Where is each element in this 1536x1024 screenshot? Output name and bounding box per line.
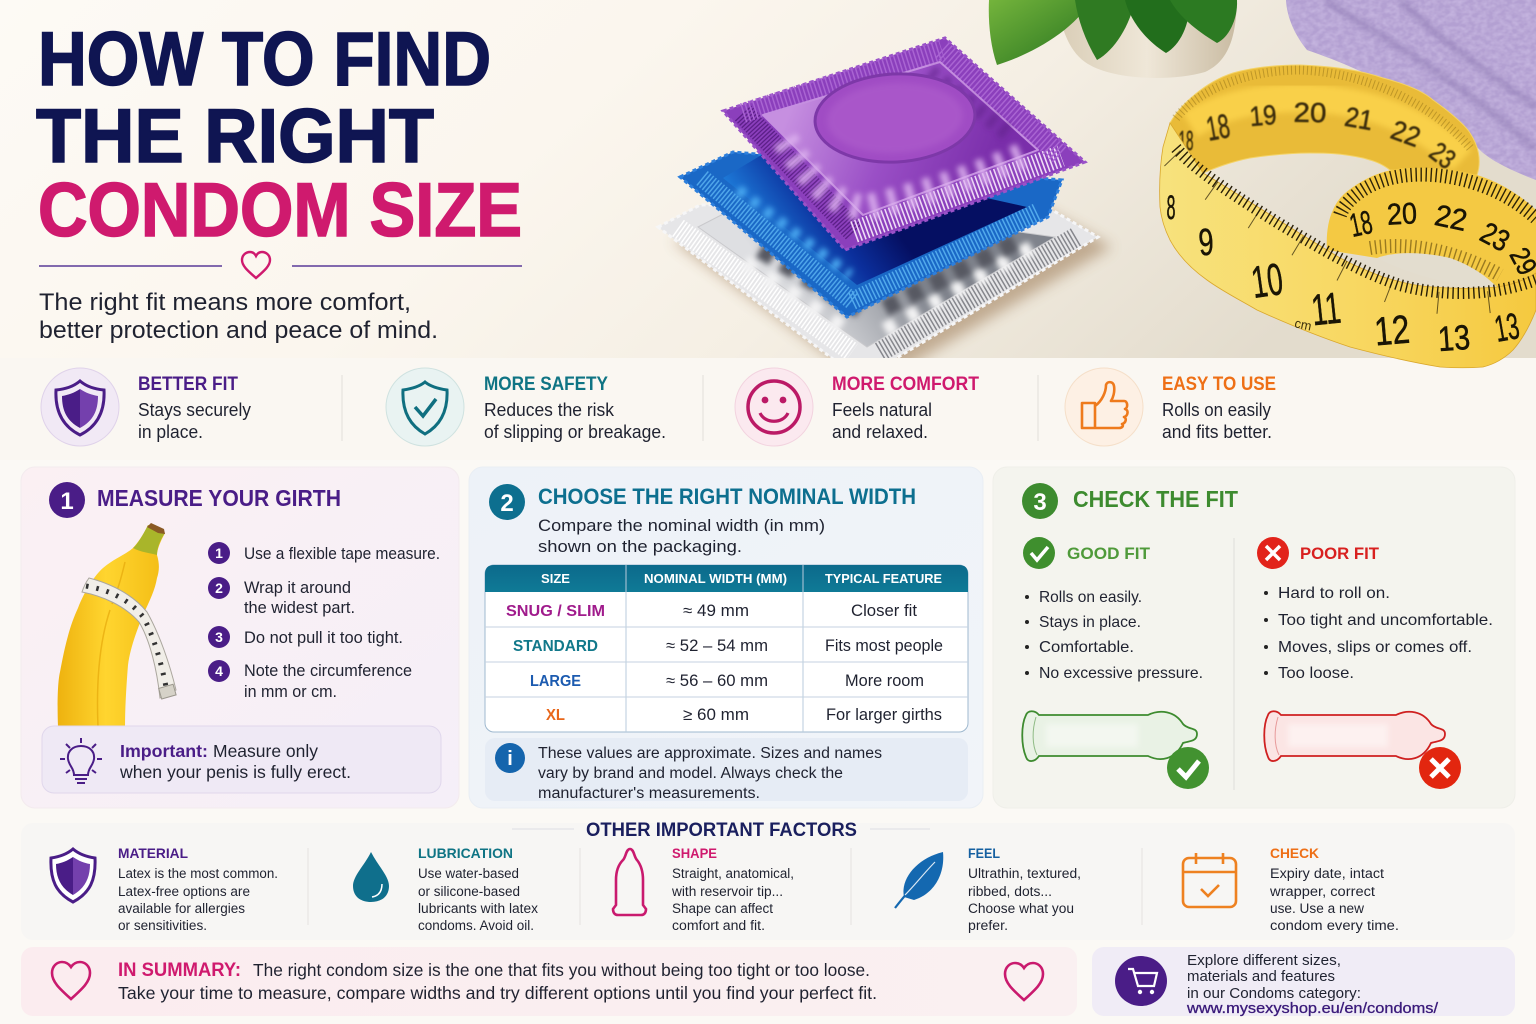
title: CONDOM SIZE <box>38 168 522 253</box>
factor: lubrication: Use water-based <box>418 866 519 881</box>
info note: manufacturer's measurements. <box>538 785 760 802</box>
more safety text: MORE SAFETY <box>484 374 608 395</box>
summary text: IN SUMMARY: <box>118 960 241 981</box>
heading: nominal width: CHOOSE THE RIGHT NOMINAL WIDTH <box>538 484 916 509</box>
icon: more safety shield <box>386 368 464 446</box>
shop text: materials and features <box>1187 969 1335 985</box>
factor: shape: with reservoir tip... <box>671 884 783 899</box>
factor: material: Latex is the most common. <box>118 866 278 881</box>
heading: other important factors: OTHER IMPORTANT FACTORS <box>586 820 857 841</box>
size table: Fits most people <box>825 637 943 655</box>
hero photo: yellow tape measure: 18 <box>1204 107 1233 149</box>
size table: STANDARD <box>513 638 598 655</box>
steps list: 1 <box>215 545 223 561</box>
factor: check: Expiry date, intact <box>1270 866 1384 881</box>
size table: NOMINAL WIDTH (MM) <box>644 571 787 586</box>
benefits row <box>41 368 1276 446</box>
intro text: shown on the packaging. <box>538 537 742 556</box>
poor fit column: POOR FIT <box>1300 544 1380 563</box>
good fit column: No excessive pressure. <box>1039 665 1203 682</box>
callout: important: when your penis is fully erect. <box>119 762 351 782</box>
hero photo: yellow tape measure: 18 <box>1346 203 1376 244</box>
factor: material: or sensitivities. <box>118 918 207 933</box>
step 3 badge <box>1022 483 1058 519</box>
shop text: www.mysexyshop.eu/en/condoms/ <box>1186 1001 1439 1017</box>
size table: XL <box>546 707 565 724</box>
banana with tape <box>58 523 176 727</box>
summary text: Take your time to measure, compare widths and try different options until you find your perfect fit. <box>118 983 877 1003</box>
callout: important: Measure only <box>213 741 318 761</box>
factor: lubrication: or silicone-based <box>418 884 520 899</box>
hero photo: yellow tape measure: 22 <box>1387 114 1425 153</box>
factor: material: available for allergies <box>118 901 245 916</box>
subtitle: The right fit means more comfort, <box>39 289 411 316</box>
step 2 badge: 2 <box>500 490 514 517</box>
step 3 badge: 3 <box>1033 489 1047 516</box>
icon: heart right <box>1005 963 1043 1000</box>
steps list: Do not pull it too tight. <box>244 629 403 647</box>
hero photo: yellow tape measure: 23 <box>1475 216 1515 259</box>
info note <box>485 738 968 802</box>
summary text: The right condom size is the one that fits you without being too tight or too loose. <box>253 960 870 980</box>
size table: ≈ 49 mm <box>683 602 749 620</box>
title <box>36 17 522 253</box>
good fit condom illustration <box>1022 711 1209 789</box>
factor: check <box>1269 845 1399 933</box>
steps list: the widest part. <box>244 599 355 617</box>
heading: measure your girth: MEASURE YOUR GIRTH <box>97 485 341 511</box>
shop text: in our Condoms category: <box>1187 986 1361 1002</box>
hero photo: yellow tape measure: 12 <box>1373 308 1411 354</box>
factor: shape: Shape can affect <box>672 901 773 916</box>
steps list: Wrap it around <box>244 579 351 597</box>
panel: choose the right nominal width <box>469 467 983 808</box>
more safety text: of slipping or breakage. <box>484 422 666 442</box>
more comfort text: Feels natural <box>832 400 932 420</box>
hero photo: yellow tape measure: 8 <box>1166 189 1176 227</box>
callout: important: Important: <box>120 741 208 761</box>
good fit column: Stays in place. <box>1039 614 1141 631</box>
factor: feel <box>968 845 1081 933</box>
size table: For larger girths <box>826 706 942 724</box>
hero photo: yellow tape measure: 20 <box>1386 197 1418 232</box>
panel: measure your girth <box>21 467 459 808</box>
factor: material: Latex-free options are <box>118 884 250 899</box>
size table: TYPICAL FEATURE <box>825 571 942 586</box>
shop text: Explore different sizes, <box>1187 953 1341 969</box>
factor: lubrication <box>418 845 538 933</box>
factor: check: use. Use a new <box>1270 901 1364 916</box>
hero photo: yellow tape measure: 21 <box>1342 101 1375 136</box>
intro text <box>538 516 825 556</box>
heading: check the fit: CHECK THE FIT <box>1073 486 1238 512</box>
good fit column: Comfortable. <box>1039 639 1134 656</box>
icon: heart left <box>52 962 90 999</box>
title divider with heart <box>39 252 522 278</box>
intro text: Compare the nominal width (in mm) <box>538 516 825 535</box>
easy to use text: and fits better. <box>1162 422 1272 442</box>
icon: condom outline <box>613 849 646 915</box>
factor: material <box>118 845 278 933</box>
more comfort text: and relaxed. <box>832 422 928 442</box>
steps list <box>208 542 440 701</box>
factor: feel: FEEL <box>968 845 1000 861</box>
size table: More room <box>845 672 924 690</box>
hero photo: yellow tape measure: 23 <box>1424 136 1462 175</box>
shop text <box>1186 953 1439 1017</box>
factor: shape <box>671 845 794 933</box>
info note: These values are approximate. Sizes and names <box>538 745 882 762</box>
hero photo: yellow tape measure: 19 <box>1248 99 1278 132</box>
icon: calendar check <box>1183 853 1236 907</box>
factor: feel: Ultrathin, textured, <box>968 866 1081 881</box>
better fit text <box>138 374 251 442</box>
icon: light bulb <box>60 738 102 783</box>
easy to use text <box>1162 374 1276 442</box>
hero photo: plant in pot <box>989 0 1237 78</box>
steps list: Note the circumference <box>244 662 412 680</box>
factor: feel: Choose what you <box>968 901 1074 916</box>
factor: shape: SHAPE <box>672 845 717 861</box>
panel: other important factors <box>21 820 1515 940</box>
panel: shop link <box>1092 947 1515 1017</box>
poor fit column: Hard to roll on. <box>1278 585 1390 602</box>
more safety text <box>484 374 666 442</box>
factor: shape: Straight, anatomical, <box>672 866 794 881</box>
step 2 badge <box>489 484 525 520</box>
hero photo background <box>0 0 1536 358</box>
good fit column <box>1023 537 1203 682</box>
hero photo: yellow tape measure: 10 <box>1248 253 1286 308</box>
hero photo: yellow tape measure <box>1160 65 1536 368</box>
poor fit column: Moves, slips or comes off. <box>1278 639 1472 656</box>
better fit text: BETTER FIT <box>138 374 238 395</box>
factor: check: wrapper, correct <box>1269 884 1375 899</box>
hero photo: towel <box>1286 0 1536 180</box>
factor: feel: ribbed, dots... <box>968 884 1052 899</box>
info note: vary by brand and model. Always check the <box>538 765 843 782</box>
steps list: in mm or cm. <box>244 683 337 701</box>
factor: feel: prefer. <box>968 918 1008 933</box>
more safety text: Reduces the risk <box>484 400 615 420</box>
factor: material: MATERIAL <box>118 845 188 861</box>
title: THE RIGHT <box>36 94 434 179</box>
hero photo: yellow tape measure: 22 <box>1432 199 1470 238</box>
callout: important <box>42 726 441 793</box>
size table: SIZE <box>541 571 570 586</box>
icon: better fit shield <box>41 368 119 446</box>
info note: i <box>507 748 513 770</box>
factor: lubrication: lubricants with latex <box>418 901 538 916</box>
size table <box>485 565 968 732</box>
hero photo: yellow tape measure: 11 <box>1309 284 1343 335</box>
better fit text: Stays securely <box>138 400 251 420</box>
more comfort text <box>832 374 979 442</box>
size table: Closer fit <box>851 602 917 620</box>
steps list: Use a flexible tape measure. <box>244 545 440 563</box>
step 1 badge <box>49 482 85 518</box>
factor: lubrication: condoms. Avoid oil. <box>418 918 534 933</box>
size table: ≥ 60 mm <box>683 706 749 724</box>
steps list: 3 <box>215 629 223 645</box>
factor: shape: comfort and fit. <box>672 918 765 933</box>
hero photo: yellow tape measure: 18 <box>1178 125 1194 156</box>
subtitle: better protection and peace of mind. <box>39 317 438 344</box>
icon: material shield <box>51 849 95 902</box>
panel: check the fit <box>993 467 1515 808</box>
factor: check: CHECK <box>1270 845 1319 861</box>
poor fit column: Too loose. <box>1278 665 1354 682</box>
icon: feather <box>895 852 943 908</box>
good fit column: GOOD FIT <box>1067 544 1151 563</box>
icon: more comfort smiley <box>735 368 813 446</box>
size table: SNUG / SLIM <box>506 603 605 620</box>
hero photo: yellow tape measure: 9 <box>1197 222 1215 264</box>
good fit column: Rolls on easily. <box>1039 589 1142 606</box>
icon: cart <box>1115 956 1167 1006</box>
hero photo: yellow tape measure: 20 <box>1293 97 1327 128</box>
size table: ≈ 52 – 54 mm <box>666 637 768 655</box>
factor: lubrication: LUBRICATION <box>418 845 513 861</box>
steps list: 2 <box>215 580 223 596</box>
hero photo: yellow tape measure: cm <box>1293 315 1313 334</box>
easy to use text: EASY TO USE <box>1162 374 1276 395</box>
poor fit condom illustration <box>1264 711 1461 789</box>
steps list: 4 <box>215 663 223 679</box>
subtitle <box>39 289 438 344</box>
easy to use text: Rolls on easily <box>1162 400 1271 420</box>
icon: water drop <box>353 852 389 902</box>
benefits strip background <box>0 358 1536 460</box>
poor fit column: Too tight and uncomfortable. <box>1278 612 1493 629</box>
factor: check: condom every time. <box>1270 918 1399 933</box>
better fit text: in place. <box>138 422 203 442</box>
size table: LARGE <box>530 673 581 690</box>
poor fit column <box>1257 537 1493 682</box>
hero photo: stacked foil packets <box>658 38 1112 368</box>
title: HOW TO FIND <box>38 17 491 102</box>
hero photo: yellow tape measure: 13 <box>1437 318 1471 359</box>
size table: ≈ 56 – 60 mm <box>666 672 768 690</box>
more comfort text: MORE COMFORT <box>832 374 979 395</box>
summary text <box>118 960 877 1003</box>
panel: summary <box>21 947 1077 1016</box>
step 1 badge: 1 <box>60 488 74 515</box>
icon: easy to use thumbs up <box>1065 368 1143 446</box>
